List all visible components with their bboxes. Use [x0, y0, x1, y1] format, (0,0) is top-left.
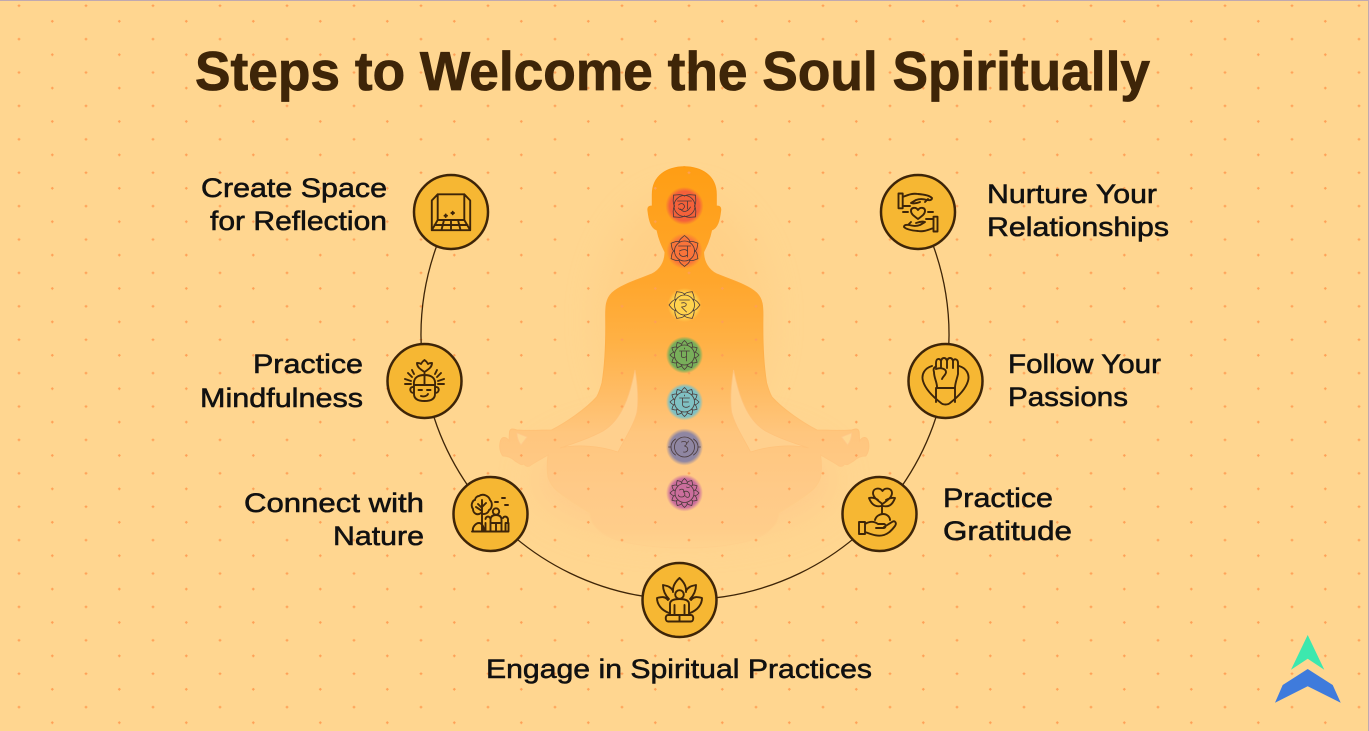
label: Practice: [943, 483, 1053, 513]
logo: blue chevron: [1275, 669, 1341, 703]
node circle: [881, 175, 955, 249]
icon: person on bench under tree: [472, 495, 508, 532]
label: Connect with: [244, 488, 424, 518]
label: Nurture Your: [987, 179, 1157, 209]
chakra: third eye violet: [666, 428, 703, 466]
chakra column: [663, 187, 706, 512]
title: Steps to Welcome the Soul Spiritually: [195, 40, 1150, 102]
step: Practice Mindfulness: [200, 344, 462, 418]
label: Create Space: [201, 173, 387, 203]
step: Engage in Spiritual Practices: [486, 563, 872, 684]
node circle: [388, 344, 462, 418]
label line two: Nature: [333, 521, 424, 551]
label line two: Passions: [1008, 382, 1128, 412]
icon: hands around heart: [898, 194, 938, 232]
chakra: throat orange: [666, 233, 702, 269]
label line two: Mindfulness: [200, 383, 363, 413]
figure: meditating silhouette: [500, 167, 869, 548]
chakra: solar yellow: [663, 283, 706, 327]
icon: lotus meditation: [657, 578, 702, 622]
label line two: Relationships: [987, 212, 1169, 242]
icon: tree detail: [493, 508, 499, 515]
step: Nurture Your Relationships: [881, 175, 1169, 249]
label: Engage in Spiritual Practices: [486, 654, 872, 684]
label: Practice: [253, 349, 363, 379]
step: Connect with Nature: [244, 477, 528, 551]
icon: fist in heart: [922, 358, 969, 404]
chakra: heart green: [666, 336, 703, 374]
connecting arc: [421, 245, 949, 600]
node circle: [842, 477, 916, 551]
chakra: root pink: [666, 474, 703, 512]
step: Create Space for Reflection: [201, 173, 488, 249]
icon: hand holding flower: [859, 489, 896, 536]
label line two: for Reflection: [210, 206, 387, 236]
icon: room: [432, 194, 470, 230]
logo: teal arrow: [1291, 635, 1324, 670]
node circle: [454, 477, 528, 551]
label line two: Gratitude: [943, 516, 1072, 546]
chakra: throat teal: [666, 384, 703, 420]
icon: mindful head: [405, 360, 444, 401]
node circle: [414, 175, 488, 249]
step: Follow Your Passions: [908, 344, 1161, 418]
node circle: [908, 344, 982, 418]
logo: [1275, 635, 1341, 703]
chakra: crown red: [666, 187, 704, 225]
label: Follow Your: [1008, 349, 1161, 379]
node circle: [642, 563, 716, 637]
step: Practice Gratitude: [842, 477, 1072, 551]
